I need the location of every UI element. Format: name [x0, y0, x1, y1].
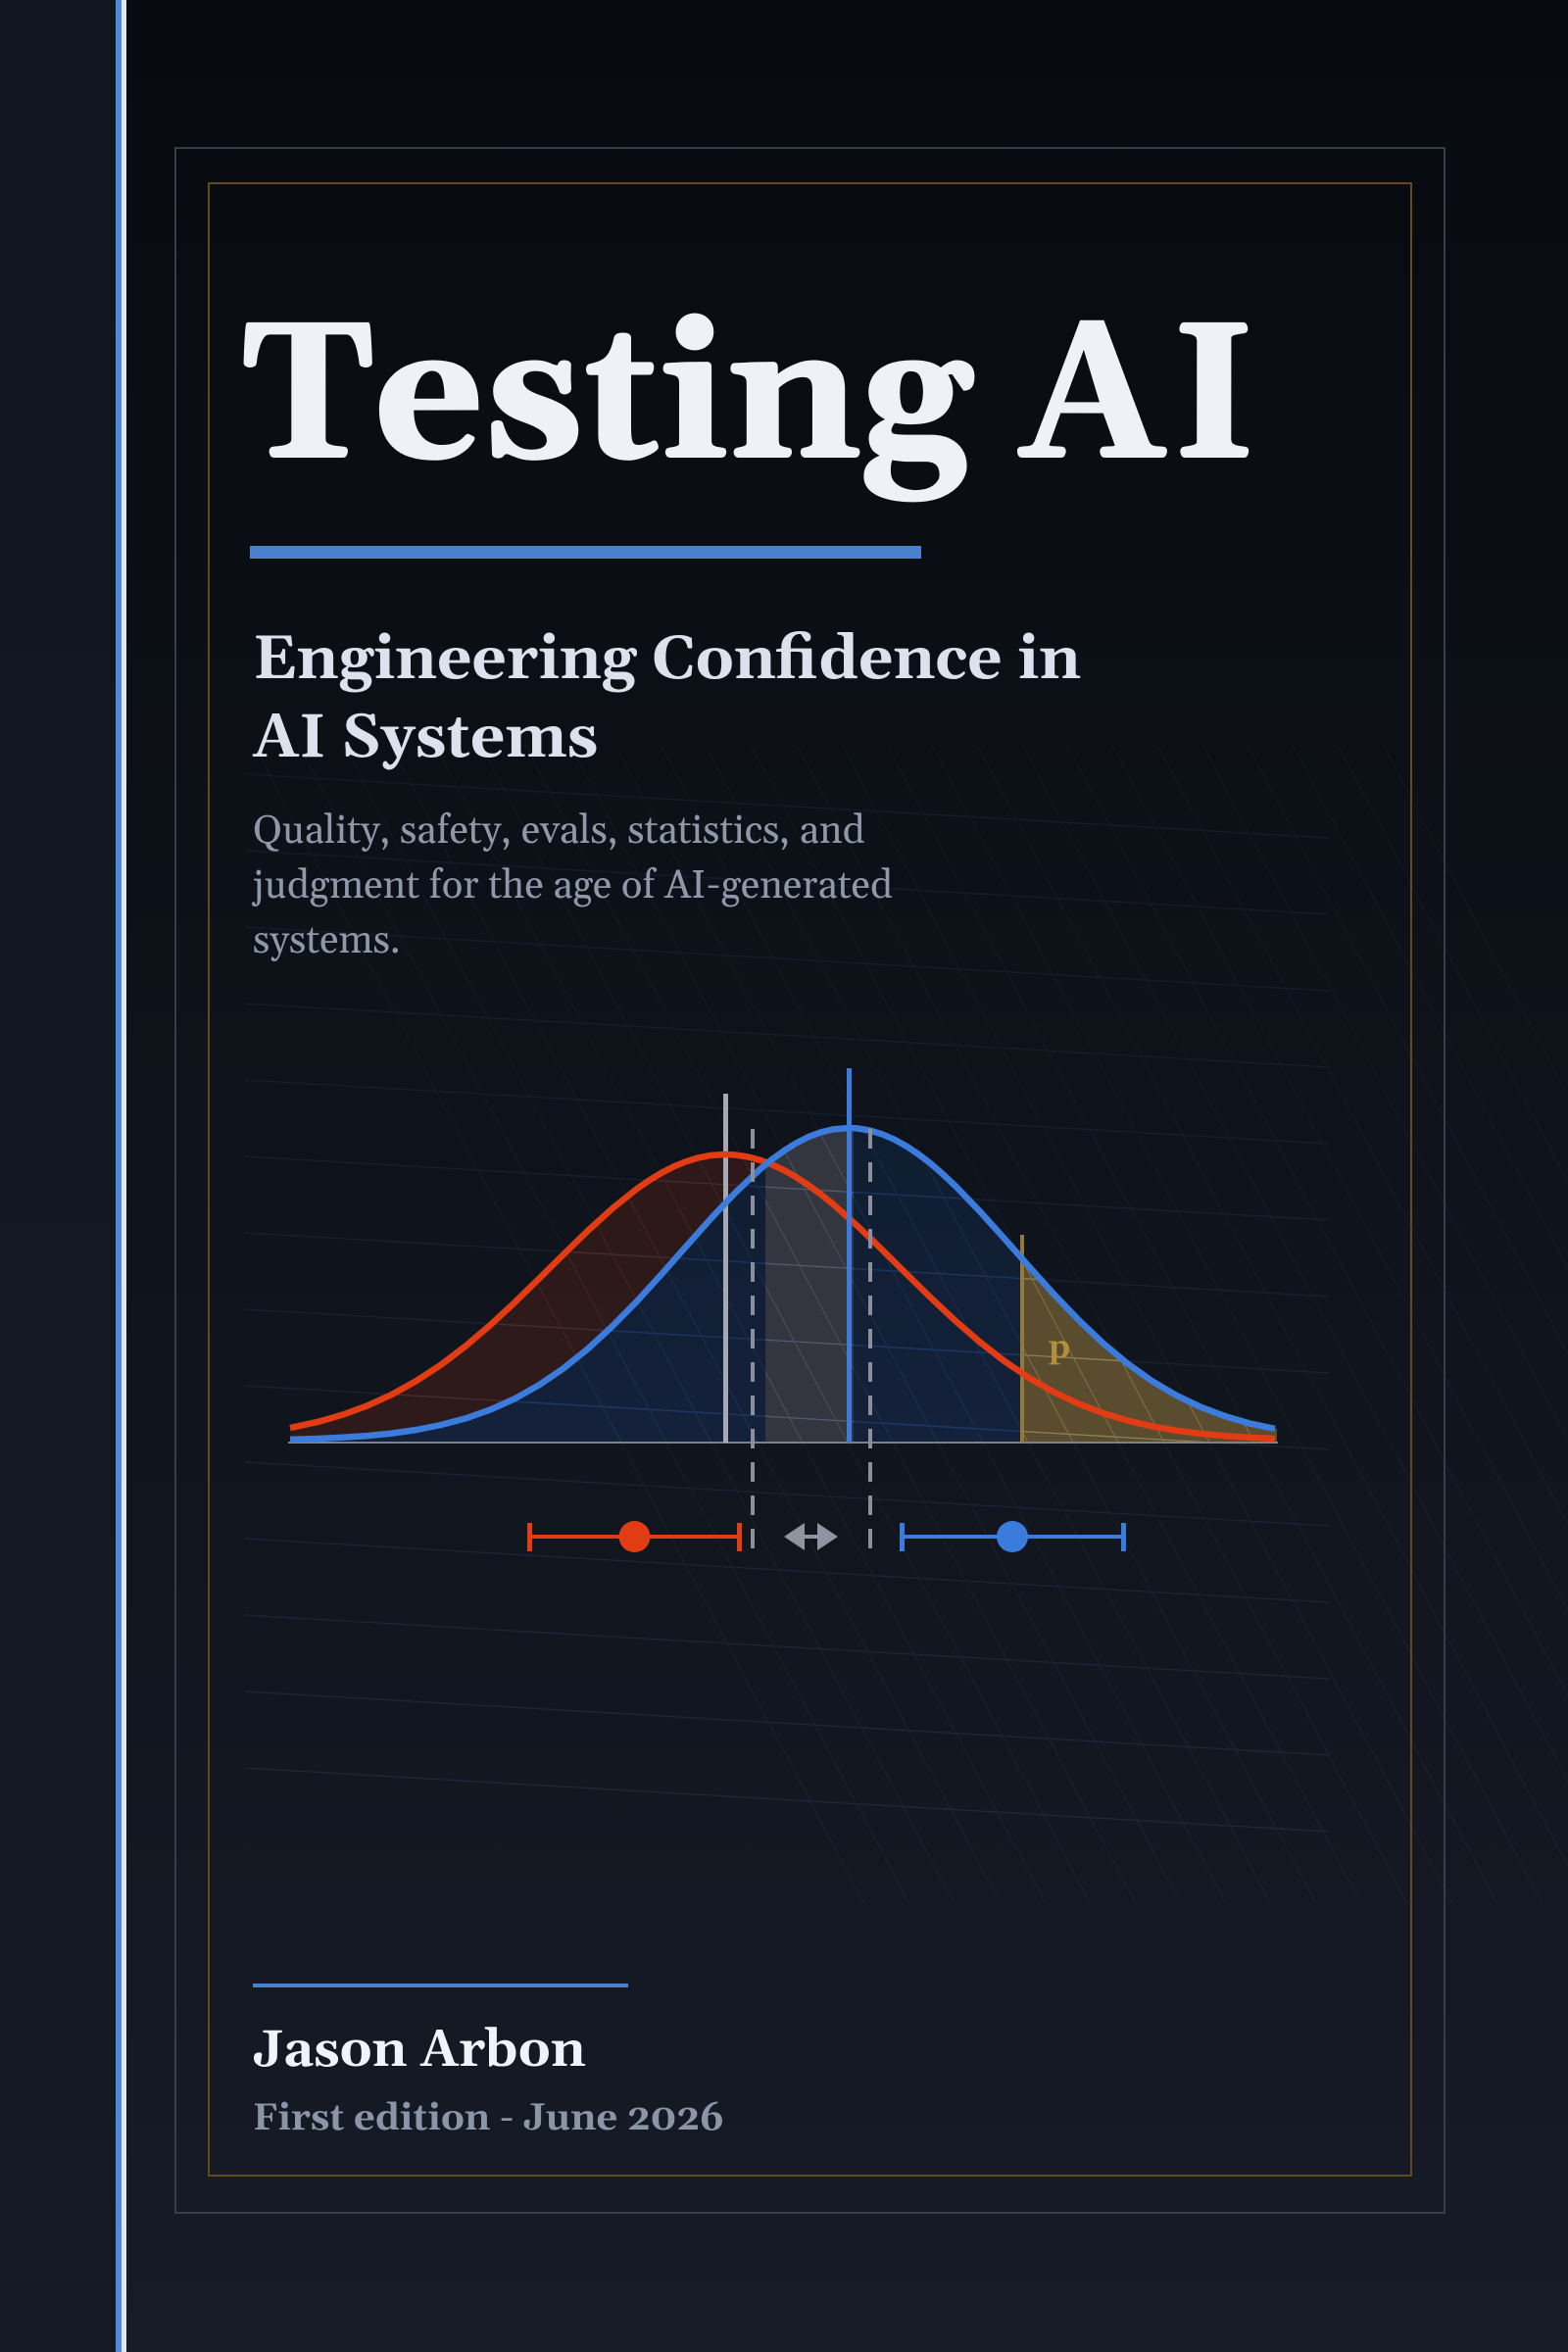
title accent bar: [250, 546, 921, 559]
description: judgment for the age of AI-generated: [252, 861, 893, 911]
edition: First edition - June 2026: [253, 2095, 724, 2142]
description: [252, 807, 893, 966]
chart fill: overlap band: [765, 1128, 854, 1443]
outer frame: [175, 148, 1445, 2213]
dashed lines: interval bounds: [753, 1129, 870, 1549]
chart fill: red distribution: [290, 1154, 1275, 1443]
chart fill: p-value tail: [1022, 1258, 1277, 1443]
subtitle: AI Systems: [252, 701, 598, 778]
inner gold frame: [209, 183, 1411, 2176]
background perspective grid: [245, 745, 1568, 1902]
description: Quality, safety, evals, statistics, and: [253, 807, 865, 857]
author name: Jason Arbon: [253, 2019, 586, 2083]
chart fill: blue distribution: [290, 1128, 1275, 1443]
blue confidence interval: [900, 1521, 1126, 1552]
difference arrow: [784, 1523, 838, 1550]
treatment mean marker: [847, 1068, 852, 1443]
description: systems.: [253, 916, 401, 966]
statistical chart: [288, 1068, 1278, 1552]
red confidence interval: [527, 1521, 742, 1552]
subtitle: [252, 622, 1081, 778]
p-value threshold marker: [1020, 1235, 1024, 1443]
title: Testing AI: [243, 278, 1257, 521]
red distribution curve: [290, 1154, 1275, 1439]
author rule: [253, 1984, 628, 1987]
spine panel: [0, 0, 126, 2352]
chart axis: [288, 1442, 1278, 1444]
blue distribution curve: [290, 1128, 1275, 1440]
subtitle: Engineering Confidence in: [253, 622, 1081, 700]
p-value label: p: [1049, 1326, 1070, 1369]
control mean marker: [723, 1094, 728, 1443]
